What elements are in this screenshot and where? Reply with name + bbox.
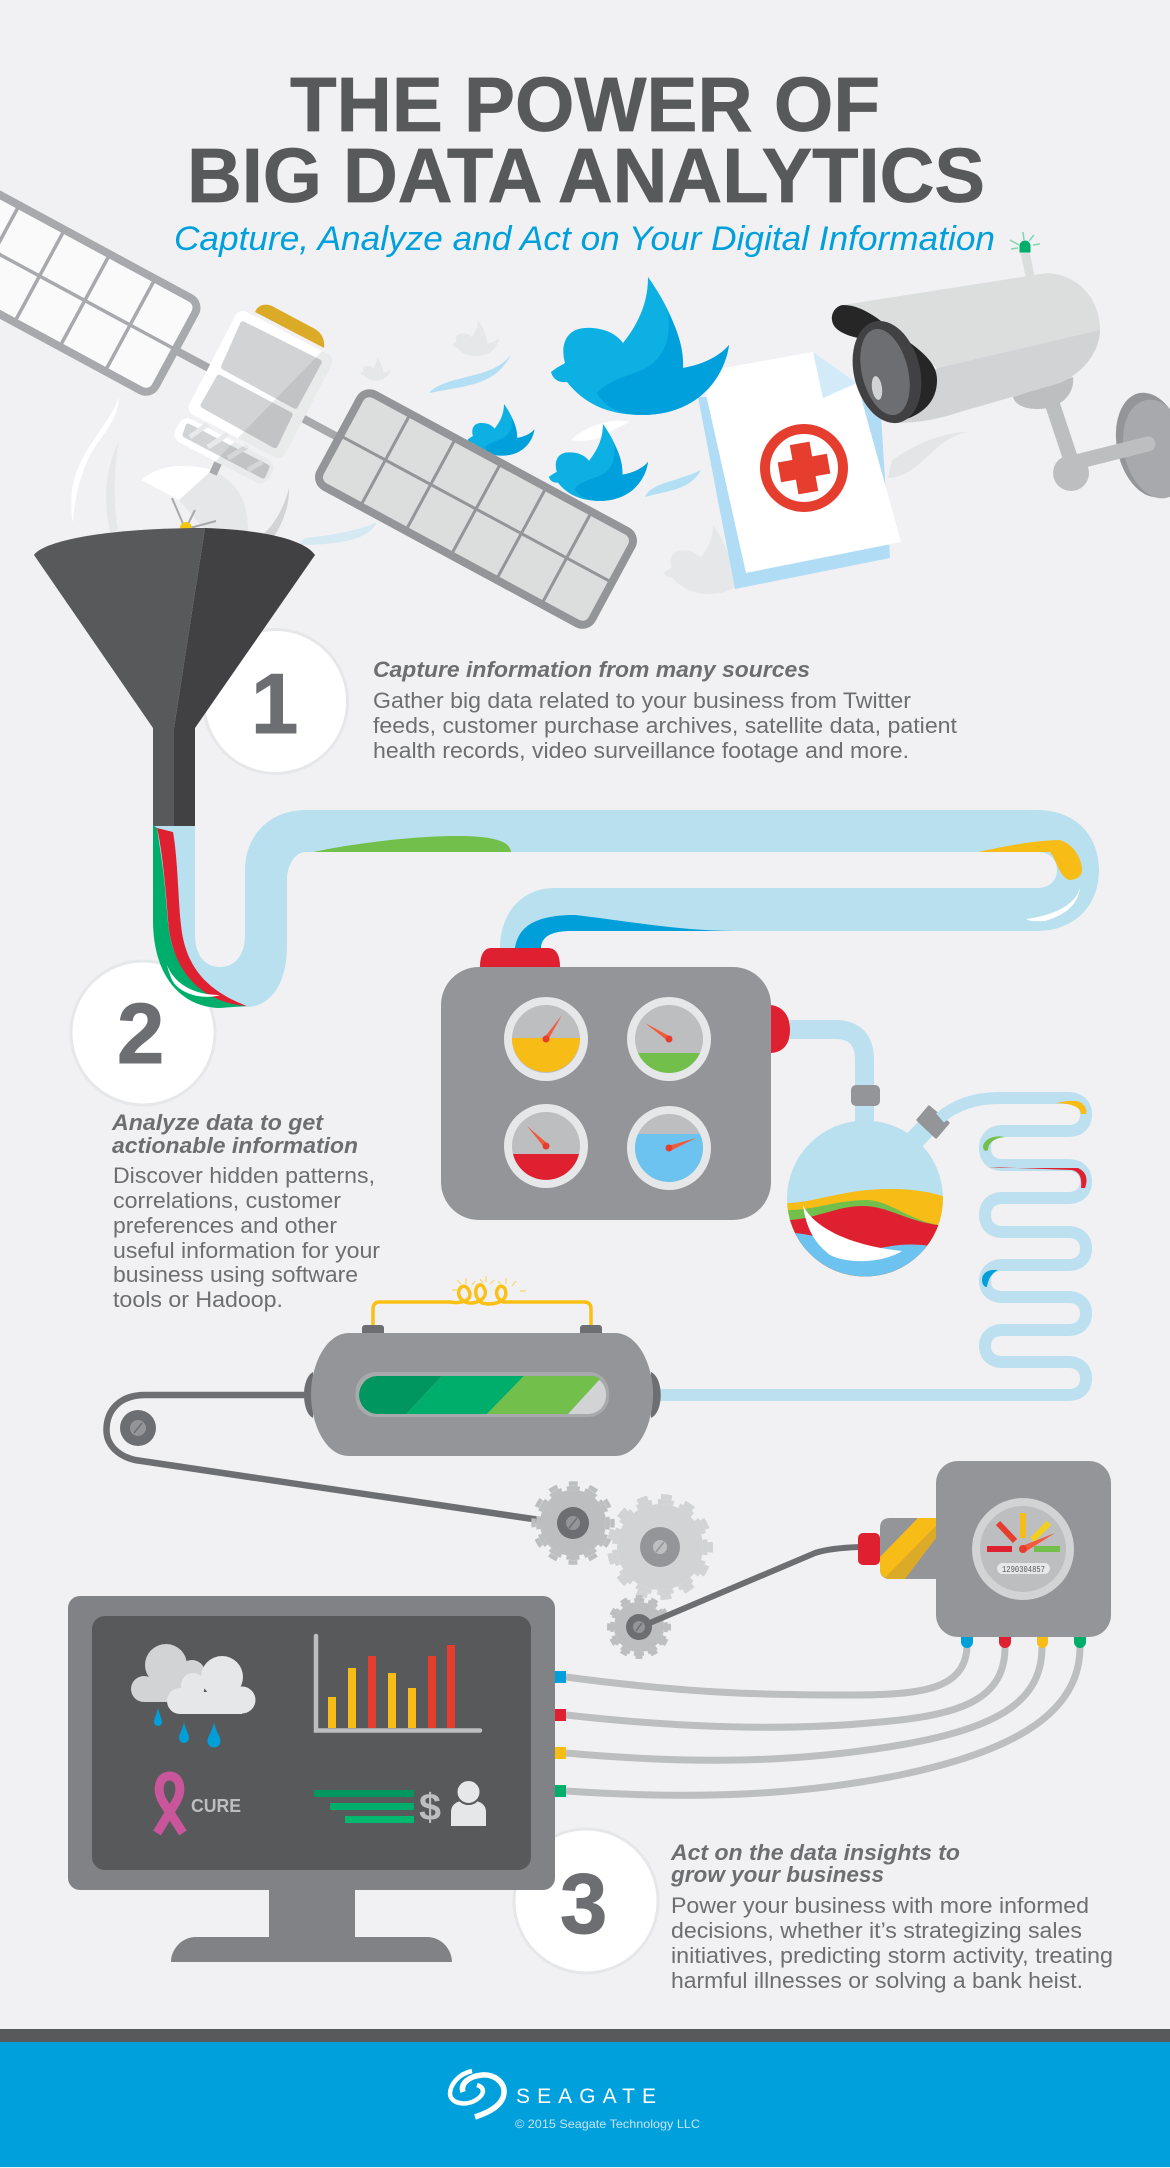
charge window [356,1372,609,1417]
funnel [34,528,315,832]
coil yellow accent [1056,1101,1086,1114]
monitor stand [171,1890,452,1962]
pulley [120,1410,156,1446]
step 3 body [671,1893,1113,1993]
gauge yellow [504,997,588,1081]
step 2 number badge [71,961,215,1105]
faded background swooshes and ghost birds [71,320,970,594]
coil blue accent [982,1270,998,1287]
step 3 heading [670,1840,960,1887]
white highlight [167,965,220,997]
red cross badge [765,429,843,507]
step 1 number badge: 1 [251,657,298,752]
camera wall mount [1013,377,1170,505]
icon: security camera [832,232,1170,505]
red stream [157,828,247,1006]
monitor [68,1596,566,1962]
icon: sales bars, dollar and person: $ [419,1787,441,1829]
pipe from machine to flask [790,1030,864,1130]
large gear [610,1496,710,1598]
step 1 text [373,657,957,763]
small gear hub [626,1614,652,1640]
camera housing [832,273,1100,423]
battery processor [304,1276,661,1456]
icon: satellite dish [141,466,248,534]
step 1 body: Gather big data related to your business from Twitter [373,688,911,713]
gold cap [255,305,324,348]
step 1 body: health records, video surveillance footage and more. [373,738,909,763]
title: BIG DATA ANALYTICS [187,133,985,219]
coil green accent [983,1136,1005,1151]
analyzer machine [441,948,790,1220]
title [187,62,985,219]
terminals [362,1325,602,1333]
meter [858,1461,1111,1648]
step 3 number badge: 3 [560,1857,607,1952]
step 3 body: initiatives, predicting storm activity, treating [671,1943,1113,1968]
bar chart [316,1636,480,1730]
step 1 body [373,688,957,763]
machine body [441,967,771,1220]
translucent shadow overlay [216,351,332,484]
flask liquid layers [787,1189,943,1276]
step 2 heading: Analyze data to get [111,1110,325,1135]
main data pipe [153,810,1099,1008]
gears [534,1484,710,1657]
icon: pink ribbon with cure label [157,1776,241,1833]
step 2 body: Discover hidden patterns, [113,1163,375,1188]
gear connected to belt [534,1484,612,1562]
step 2 body: useful information for your [113,1238,380,1263]
step 2 body: correlations, customer [113,1188,341,1213]
small gear [609,1597,669,1657]
icon: satellite [0,156,637,629]
red outlet cap [771,1005,790,1053]
step 2 body: preferences and other [113,1213,337,1238]
blue blob [515,915,735,948]
flask body [787,1120,943,1276]
step 2 body: tools or Hadoop. [113,1287,283,1312]
green blob [313,836,511,852]
step 3 body: harmful illnesses or solving a bank heist. [671,1968,1083,1993]
yellow wire with coil [373,1285,591,1325]
meter readout: 1290304857 [1002,1565,1045,1575]
title: THE POWER OF [290,62,880,148]
red inlet cap [480,948,560,967]
flask with mixed data [780,1030,950,1280]
step 1 number badge [204,630,348,774]
gauge blue [627,1106,711,1190]
seagate wordmark: SEAGATE [516,2085,656,2108]
copyright: © 2015 Seagate Technology LLC [515,2117,700,2131]
serpentine coil pipe [655,1098,1087,1395]
icon: storm clouds [131,1644,256,1747]
step 3 text [670,1840,1113,1993]
flask neck collar [851,1085,880,1106]
meter ports [961,1637,1086,1648]
battery body [311,1333,653,1456]
belt from battery to gears [106,1395,560,1523]
gauge green [627,997,711,1081]
icon: medical record document [698,352,901,589]
camera antenna and green light [1010,232,1040,276]
monitor frame [68,1596,555,1890]
subtitle: Capture, Analyze and Act on Your Digital Information [174,220,995,258]
side caps [304,1372,661,1418]
footer [0,2029,1170,2167]
wire sparks [452,1276,526,1291]
step 2 text [111,1110,380,1312]
flask neck to coil [905,1122,932,1150]
step 2 heading: actionable information [112,1133,358,1158]
step 2 heading [111,1110,358,1158]
footer blue band [0,2042,1170,2167]
step 1 body: feeds, customer purchase archives, satellite data, patient [373,713,957,738]
icon: pink ribbon with cure label: CURE [191,1796,241,1816]
monitor ports [555,1671,566,1797]
flask side collar [918,1107,948,1137]
flask highlight [803,1205,902,1261]
step 3 body: decisions, whether it’s strategizing sales [671,1918,1082,1943]
satellite strut [175,350,345,474]
step 3 heading: Act on the data insights to [670,1840,960,1865]
monitor screen [92,1616,531,1870]
yellow blob [978,840,1082,880]
white glint [1026,888,1080,921]
icon: medium twitter bird [549,421,648,501]
step 2 body [113,1163,380,1312]
camera lens [842,314,937,430]
icon: large twitter bird [551,277,729,415]
solar panel right [315,389,637,629]
step 3 body: Power your business with more informed [671,1893,1089,1918]
meter dial [972,1498,1074,1600]
belt from small gear to meter [645,1547,860,1625]
icon: small twitter bird behind panel [468,404,534,456]
solar panel left [0,156,200,396]
green stream [153,825,246,1008]
seagate logo mark [450,2071,504,2117]
meter connector [858,1518,936,1579]
meter box [936,1461,1111,1637]
step 2 body: business using software [113,1262,358,1287]
cables from meter to monitor [566,1647,1080,1795]
icon: sales bars, dollar and person [314,1780,486,1829]
footer dark bar [0,2029,1170,2042]
satellite body [174,304,332,484]
step 2 number badge: 2 [117,987,164,1082]
coil red accent [988,1167,1087,1188]
gauge red [504,1104,588,1188]
step 1 heading: Capture information from many sources [373,657,810,682]
step 3 number badge [514,1829,658,1973]
step 3 heading: grow your business [670,1862,884,1887]
